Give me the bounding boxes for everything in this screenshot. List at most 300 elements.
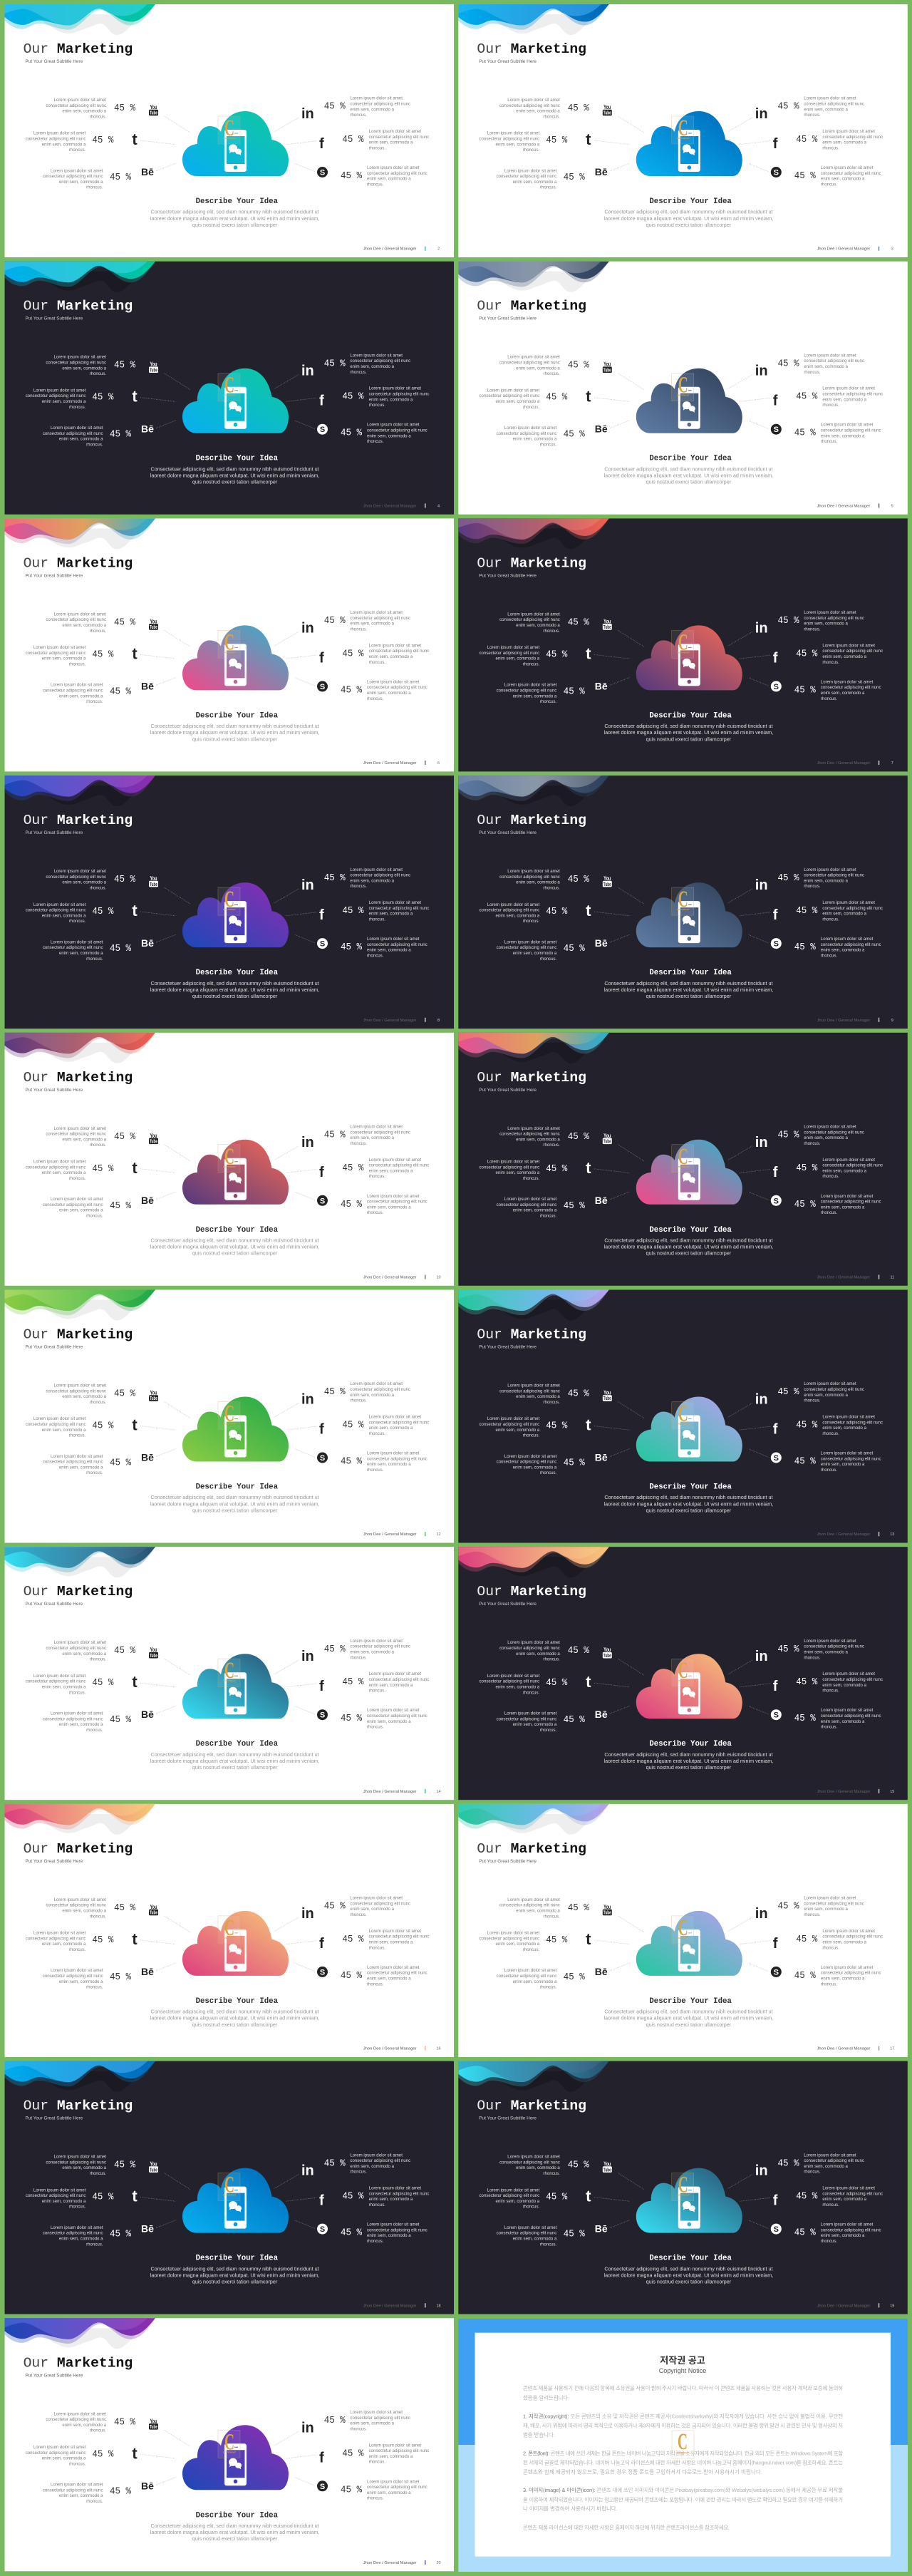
stat: YouTube (46, 98, 190, 133)
stat: Skype: Lorem ipsum dolor sit amet (367, 2479, 420, 2484)
stat: LinkedIn: rhoncus. (350, 1655, 367, 1660)
stat: YouTube: consectetur adipiscing elit nunc (46, 1389, 106, 1393)
cloud with phone: C (678, 1658, 688, 1684)
stat: Skype: S (320, 1711, 325, 1720)
stat: YouTube: You (150, 1132, 157, 1139)
description: quis nostrud exerci tation ullamcorper (192, 479, 278, 485)
stat: Behance: rhoncus. (86, 1728, 103, 1733)
stat: Facebook: enim sem, commodo a (369, 2197, 413, 2202)
description: quis nostrud exerci tation ullamcorper (646, 479, 732, 485)
stat: Behance: enim sem, commodo a (513, 1465, 557, 1470)
subtitle: Put Your Great Subtitle Here (479, 2116, 537, 2121)
stat: Skype: enim sem, commodo a (367, 1462, 411, 1467)
stat: Facebook: consectetur adipiscing elit nunc (369, 649, 429, 654)
wave header (4, 776, 155, 806)
cloud with phone: C (678, 373, 688, 398)
description: quis nostrud exerci tation ullamcorper (646, 736, 732, 742)
stat: Behance: 45 % (564, 686, 585, 697)
description: Consectetuer adipiscing elit, sed diam nonummy nibh euismod tincidunt ut (604, 2265, 772, 2272)
stat: Behance: rhoncus. (540, 1985, 557, 1990)
stat: Behance: Lorem ipsum dolor sit amet (51, 1454, 103, 1459)
stat: YouTube (499, 1640, 644, 1675)
notice card (475, 2333, 891, 2557)
stat: Behance: Lorem ipsum dolor sit amet (504, 1454, 557, 1459)
stat: Facebook: rhoncus. (822, 1945, 839, 1950)
stat: Behance: enim sem, commodo a (59, 1208, 103, 1213)
description: quis nostrud exerci tation ullamcorper (192, 2535, 278, 2542)
stat: Skype: Lorem ipsum dolor sit amet (367, 1194, 420, 1199)
subtitle: Put Your Great Subtitle Here (479, 59, 537, 64)
stat: LinkedIn: enim sem, commodo a (350, 364, 395, 369)
stat: Facebook: consectetur adipiscing elit nunc (369, 392, 429, 397)
description (150, 2255, 319, 2285)
title: Our Marketing (477, 813, 586, 828)
stat: Tumblr: 45 % (92, 135, 114, 146)
stat: LinkedIn (274, 1381, 410, 1417)
stat: YouTube: Lorem ipsum dolor sit amet (507, 1897, 560, 1902)
description: Describe Your Idea (649, 1483, 732, 1491)
stat: Tumblr: t (132, 1673, 138, 1691)
description (150, 455, 319, 485)
stat: Facebook: Lorem ipsum dolor sit amet (822, 1671, 875, 1676)
stat: YouTube: Lorem ipsum dolor sit amet (54, 2411, 106, 2416)
stat: Facebook: f (773, 1936, 778, 1952)
stat: YouTube: Lorem ipsum dolor sit amet (507, 98, 560, 103)
stat: Skype: 45 % (341, 2227, 363, 2239)
stat: Behance: enim sem, commodo a (59, 437, 103, 442)
stat: YouTube (46, 1126, 190, 1161)
stat: YouTube: enim sem, commodo a (516, 2165, 560, 2170)
notice intro (523, 2385, 843, 2401)
stat: Skype: 45 % (794, 428, 816, 439)
stat: Behance (497, 163, 630, 190)
description: laoreet dolore magna aliquam erat volutpat. Ut wisi enim ad minim veniam, (604, 215, 773, 222)
stat: Tumblr (26, 1416, 176, 1438)
stat: LinkedIn: consectetur adipiscing elit nunc (350, 1387, 410, 1392)
stat: LinkedIn: enim sem, commodo a (804, 1907, 848, 1912)
footer: 8 (437, 1019, 440, 1023)
stat: YouTube: Tube (603, 1911, 611, 1916)
stat: Behance (497, 1706, 630, 1733)
stat: YouTube: consectetur adipiscing elit nunc (499, 875, 560, 880)
stat: Skype: consectetur adipiscing elit nunc (821, 1714, 881, 1719)
stat: Skype: consectetur adipiscing elit nunc (367, 942, 428, 947)
stat: Skype (294, 1706, 428, 1730)
stat: Skype: S (320, 426, 325, 434)
stat: Skype: enim sem, commodo a (367, 2233, 411, 2238)
stat: LinkedIn: 45 % (324, 615, 346, 627)
stat: Skype (294, 1192, 428, 1215)
stat: Behance: Lorem ipsum dolor sit amet (51, 1711, 103, 1716)
stat: Facebook: f (319, 1936, 324, 1952)
stat: LinkedIn: 45 % (324, 1644, 346, 1655)
stat: LinkedIn: Lorem ipsum dolor sit amet (804, 1125, 856, 1130)
stat: Skype: S (320, 2483, 325, 2491)
notice intro: 콘텐츠 제품을 사용하기 전에 다음의 항목에 소유권을 사용이 밝혀 주시기 바랍니다. 따라서 이 콘텐츠 제품을 사용하는 것은 사용자 계약과 보증에 동의하 (523, 2385, 843, 2391)
stat: Facebook: enim sem, commodo a (369, 1168, 413, 1173)
notice section 2 (523, 2451, 843, 2475)
stat: YouTube: Lorem ipsum dolor sit amet (54, 1126, 106, 1131)
stat: Skype: rhoncus. (821, 1468, 837, 1473)
stat: Behance: Lorem ipsum dolor sit amet (51, 939, 103, 944)
description: Describe Your Idea (196, 455, 279, 463)
cloud with phone: COPYRIGHT (677, 2194, 690, 2197)
stat: Tumblr: Lorem ipsum dolor sit amet (487, 388, 539, 393)
stat: LinkedIn: Lorem ipsum dolor sit amet (350, 610, 403, 615)
stat: Skype: rhoncus. (821, 696, 837, 701)
stat: Facebook: rhoncus. (822, 917, 839, 922)
stat: Behance: Bē (595, 1195, 608, 1206)
stat: YouTube: consectetur adipiscing elit nunc (46, 2160, 106, 2165)
stat: Facebook: rhoncus. (822, 1689, 839, 1694)
stat: Behance: consectetur adipiscing elit nunc (43, 174, 103, 179)
description: Describe Your Idea (196, 1226, 279, 1235)
panel: slide 7 (458, 518, 908, 771)
cloud with phone: COPYRIGHT (223, 908, 236, 911)
footer: 4 (437, 504, 440, 508)
stat: YouTube: enim sem, commodo a (62, 1652, 107, 1657)
stat: Tumblr: 45 % (546, 135, 568, 146)
cloud with phone: C (224, 373, 234, 398)
footer (817, 761, 893, 766)
stat: YouTube: rhoncus. (90, 1400, 106, 1405)
panel: slide 19 (458, 2061, 908, 2314)
stat: LinkedIn: in (301, 1391, 314, 1407)
stat: Behance: Lorem ipsum dolor sit amet (504, 939, 557, 944)
description: laoreet dolore magna aliquam erat volutpat. Ut wisi enim ad minim veniam, (604, 729, 773, 736)
stat: YouTube: You (150, 1646, 157, 1653)
stat: LinkedIn: 45 % (778, 1644, 799, 1655)
stat: Behance (497, 934, 630, 962)
stat: Behance (43, 1706, 176, 1733)
stat: Tumblr: enim sem, commodo a (496, 142, 540, 147)
stat: Behance: rhoncus. (86, 1470, 103, 1475)
title: Our Marketing (24, 813, 133, 828)
title: Our Marketing (24, 1584, 133, 1599)
stat: LinkedIn: in (755, 106, 768, 122)
wave header (4, 1033, 155, 1063)
stat: LinkedIn: Lorem ipsum dolor sit amet (350, 96, 403, 101)
stat: Facebook: f (773, 1679, 778, 1694)
description: Consectetuer adipiscing elit, sed diam nonummy nibh euismod tincidunt ut (604, 723, 772, 729)
cloud with phone (636, 1654, 742, 1719)
stat: Facebook: consectetur adipiscing elit nunc (369, 1420, 429, 1425)
description: laoreet dolore magna aliquam erat volutpat. Ut wisi enim ad minim veniam, (150, 1244, 319, 1250)
stat: Behance: 45 % (564, 172, 585, 183)
stat: Facebook (740, 2186, 883, 2209)
stat: Facebook: rhoncus. (369, 1689, 385, 1694)
description (150, 1740, 319, 1771)
description: Describe Your Idea (649, 1997, 732, 2006)
stat: Behance: enim sem, commodo a (513, 694, 557, 699)
stat: YouTube: 45 % (568, 2160, 589, 2171)
stat: Skype: S (320, 2225, 325, 2234)
stat: Facebook (740, 643, 883, 666)
stat: YouTube: rhoncus. (90, 371, 106, 376)
stat: Skype (294, 421, 428, 444)
stat: YouTube: You (603, 1903, 611, 1910)
stat: Skype: rhoncus. (821, 1725, 837, 1730)
stat: Behance: 45 % (110, 1457, 132, 1468)
cloud with phone: COPYRIGHT (677, 137, 690, 140)
cloud with phone: COPYRIGHT (223, 2451, 236, 2453)
stat: Behance: consectetur adipiscing elit nunc (43, 689, 103, 694)
title: Our Marketing (24, 555, 133, 571)
stat: Facebook: enim sem, commodo a (369, 140, 413, 145)
stat: YouTube: rhoncus. (543, 2171, 560, 2176)
description: quis nostrud exerci tation ullamcorper (646, 1250, 732, 1257)
stat: Facebook: 45 % (796, 134, 818, 145)
stat: YouTube: enim sem, commodo a (516, 1394, 560, 1399)
stat: LinkedIn: 45 % (778, 1901, 799, 1912)
stat: Behance: consectetur adipiscing elit nunc (497, 1202, 556, 1207)
stat: Facebook: Lorem ipsum dolor sit amet (822, 2186, 875, 2191)
subtitle: Put Your Great Subtitle Here (26, 830, 83, 835)
stat: Tumblr: Lorem ipsum dolor sit amet (487, 131, 539, 136)
stat: LinkedIn (727, 610, 864, 646)
stat: Tumblr: enim sem, commodo a (496, 1170, 540, 1175)
wave header (458, 1804, 609, 1835)
stat: LinkedIn: rhoncus. (350, 2426, 367, 2431)
stat: Skype (748, 163, 881, 187)
stat: Tumblr: rhoncus. (69, 1690, 86, 1695)
footer: Jhon Dee / General Manager (363, 2047, 417, 2051)
stat: YouTube: You (603, 361, 611, 368)
stat: YouTube: Tube (150, 111, 157, 116)
stat: YouTube: Lorem ipsum dolor sit amet (507, 355, 560, 360)
stat: Skype: S (774, 1711, 779, 1720)
stat: YouTube: Tube (603, 1140, 611, 1145)
stat: Behance: rhoncus. (540, 185, 557, 190)
panel: slide 16 (4, 1804, 454, 2057)
description (604, 1740, 773, 1771)
stat: Tumblr: consectetur adipiscing elit nunc (26, 908, 86, 913)
stat: Skype: 45 % (341, 2484, 363, 2495)
stat: LinkedIn: 45 % (778, 2158, 799, 2169)
stat: Behance: 45 % (564, 2229, 585, 2240)
stat: Skype: rhoncus. (367, 2496, 384, 2501)
stat: Tumblr: Lorem ipsum dolor sit amet (33, 1674, 86, 1679)
stat: Facebook: 45 % (796, 1934, 818, 1945)
stat: Skype: rhoncus. (367, 1982, 384, 1987)
footer: 20 (436, 2561, 441, 2565)
cloud with phone (182, 1654, 289, 1719)
stat: YouTube: consectetur adipiscing elit nunc (46, 1646, 106, 1651)
stat: Tumblr: t (132, 644, 138, 662)
stat: Tumblr: Lorem ipsum dolor sit amet (487, 1416, 539, 1421)
footer: 9 (891, 1019, 893, 1023)
stat: YouTube: 45 % (114, 1902, 136, 1914)
stat: Behance: enim sem, commodo a (513, 1208, 557, 1213)
description: Consectetuer adipiscing elit, sed diam nonummy nibh euismod tincidunt ut (151, 1494, 319, 1500)
footer: 6 (437, 761, 440, 766)
panel: slide 11 (458, 1033, 908, 1286)
stat: Tumblr: Lorem ipsum dolor sit amet (487, 1674, 539, 1679)
footer (817, 2046, 894, 2051)
stat: Skype: consectetur adipiscing elit nunc (367, 685, 428, 690)
stat: Behance (497, 2220, 630, 2247)
stat: Tumblr: Lorem ipsum dolor sit amet (33, 2445, 86, 2450)
stat: LinkedIn: rhoncus. (350, 1912, 367, 1917)
footer: 15 (890, 1790, 894, 1794)
stat: LinkedIn: 45 % (778, 872, 799, 884)
stat: Skype: 45 % (794, 942, 816, 953)
stat: Behance: Bē (595, 680, 608, 691)
footer: Jhon Dee / General Manager (363, 1790, 417, 1794)
stat: Skype: 45 % (794, 1456, 816, 1467)
stat: Behance: rhoncus. (86, 1985, 103, 1990)
stat: Facebook: Lorem ipsum dolor sit amet (822, 129, 875, 134)
stat: YouTube: Tube (150, 882, 157, 887)
wave header (458, 2061, 609, 2092)
stat: YouTube (46, 1640, 190, 1675)
stat: LinkedIn (727, 1639, 864, 1674)
stat: Tumblr: enim sem, commodo a (42, 2456, 86, 2461)
description: laoreet dolore magna aliquam erat volutpat. Ut wisi enim ad minim veniam, (150, 2529, 319, 2535)
stat: YouTube: 45 % (568, 1389, 589, 1400)
stat: LinkedIn: rhoncus. (804, 1912, 821, 1917)
stat: Tumblr (26, 1159, 176, 1181)
stat: Facebook: f (319, 650, 324, 666)
stat: LinkedIn: rhoncus. (350, 884, 367, 889)
stat: Facebook: consectetur adipiscing elit nunc (822, 1163, 883, 1168)
stat: YouTube: enim sem, commodo a (516, 1908, 560, 1913)
description (150, 197, 319, 228)
notice section 1: 벌을 받습니다. (523, 2432, 555, 2438)
stat: LinkedIn: 45 % (324, 1386, 346, 1398)
stat: Tumblr: rhoncus. (523, 662, 540, 667)
cloud with phone (182, 2168, 289, 2233)
stat: Skype (748, 1192, 881, 1215)
stat: Facebook: f (773, 136, 778, 152)
description: quis nostrud exerci tation ullamcorper (192, 1250, 278, 1257)
stat: Facebook: consectetur adipiscing elit nunc (822, 649, 883, 654)
stat: YouTube: enim sem, commodo a (62, 2165, 107, 2170)
title: Our Marketing (24, 299, 133, 314)
stat: Behance: consectetur adipiscing elit nunc (43, 1460, 103, 1465)
stat: Skype: S (320, 1197, 325, 1205)
stat: Behance: consectetur adipiscing elit nunc (43, 1202, 103, 1207)
stat: Skype: S (774, 1454, 779, 1463)
stat: Behance: enim sem, commodo a (513, 180, 557, 185)
cloud with phone: C (224, 629, 234, 655)
stat: Tumblr: enim sem, commodo a (496, 656, 540, 661)
cloud with phone: COPYRIGHT (677, 1165, 690, 1168)
stat: Skype: enim sem, commodo a (367, 2490, 411, 2495)
stat: LinkedIn: 45 % (324, 2158, 346, 2169)
stat: LinkedIn (274, 2410, 410, 2446)
stat: LinkedIn (727, 2153, 864, 2189)
stat: Skype: Lorem ipsum dolor sit amet (367, 937, 420, 942)
stat: LinkedIn (274, 96, 410, 132)
stat: LinkedIn: rhoncus. (350, 2170, 367, 2175)
stat: Tumblr: 45 % (546, 392, 568, 403)
stat: Skype (748, 1448, 881, 1473)
stat: LinkedIn: consectetur adipiscing elit nunc (804, 616, 864, 621)
stat: YouTube: You (150, 361, 157, 368)
stat: Skype (748, 1963, 881, 1987)
stat: Facebook: 45 % (342, 648, 364, 659)
description: quis nostrud exerci tation ullamcorper (192, 1764, 278, 1771)
stat: Facebook: enim sem, commodo a (369, 2454, 413, 2459)
stat: Facebook: Lorem ipsum dolor sit amet (822, 1158, 875, 1163)
stat: Behance: enim sem, commodo a (59, 2237, 103, 2242)
stat: YouTube: Tube (150, 1140, 157, 1145)
stat: YouTube: consectetur adipiscing elit nunc (499, 1132, 560, 1137)
watermark (672, 2429, 694, 2458)
footer: 10 (436, 1276, 441, 1280)
stat: Skype: rhoncus. (367, 439, 384, 444)
subtitle: Put Your Great Subtitle Here (26, 1859, 83, 1864)
stat: Facebook: Lorem ipsum dolor sit amet (822, 1929, 875, 1934)
stat: YouTube (46, 2411, 190, 2446)
stat: Tumblr: Lorem ipsum dolor sit amet (33, 645, 86, 650)
stat: Tumblr: rhoncus. (69, 1433, 86, 1438)
stat: LinkedIn: enim sem, commodo a (804, 1649, 848, 1654)
cloud with phone (636, 111, 742, 176)
stat: Skype: rhoncus. (367, 1725, 384, 1730)
description: Consectetuer adipiscing elit, sed diam nonummy nibh euismod tincidunt ut (604, 209, 772, 215)
stat: Facebook: 45 % (796, 391, 818, 403)
description: Describe Your Idea (196, 711, 279, 720)
stat: YouTube: Tube (603, 368, 611, 373)
stat: LinkedIn (727, 867, 864, 903)
stat: LinkedIn: consectetur adipiscing elit nunc (350, 873, 410, 878)
stat: Behance: rhoncus. (540, 957, 557, 962)
stat: Tumblr: rhoncus. (69, 405, 86, 410)
stat: YouTube: You (150, 103, 157, 110)
notice section 3: 3. 이미지(image) & 아이콘(icon): 콘텐츠 내에 쓰인 이미지와 아이콘은 Pixabay(pixabay.com)와 Webalys(webalys.com) 등에서 제공한 무료 저작물 (523, 2487, 843, 2493)
stat: YouTube: Tube (150, 1396, 157, 1401)
stat: Facebook: f (319, 2193, 324, 2209)
stat: YouTube: You (150, 617, 157, 624)
stat: Skype: rhoncus. (367, 1468, 384, 1473)
stat: LinkedIn: rhoncus. (804, 2170, 821, 2175)
footer: Jhon Dee / General Manager (363, 1276, 417, 1280)
footer: Jhon Dee / General Manager (363, 1019, 417, 1023)
notice section 1: 재, 배포, 사기 위험에 따라서 영리 목적으로 이용하거나 제3자에게 이용하는 것은 금지되어 있습니다. 이러한 불법 행위 발견 시 관련된 민사 및 형사상의 처 (523, 2422, 843, 2429)
stat: Facebook: enim sem, commodo a (822, 397, 867, 402)
stat: YouTube: 45 % (114, 874, 136, 885)
stat: Tumblr: 45 % (546, 1163, 568, 1175)
footer (363, 2046, 441, 2051)
stat: YouTube: rhoncus. (543, 885, 560, 890)
stat: Tumblr (26, 902, 176, 924)
stat: Skype: enim sem, commodo a (367, 1976, 411, 1981)
stat: Behance: 45 % (110, 1714, 132, 1726)
stat: Facebook: rhoncus. (369, 1431, 385, 1436)
stat: YouTube: enim sem, commodo a (62, 1908, 107, 1913)
stat: Tumblr: t (586, 388, 591, 406)
stat: LinkedIn: rhoncus. (350, 370, 367, 375)
stat: Behance: rhoncus. (540, 699, 557, 704)
stat: Skype: 45 % (794, 684, 816, 696)
stat: Facebook (286, 386, 429, 409)
stat: Facebook (740, 1929, 883, 1952)
cloud with phone: COPYRIGHT (677, 651, 690, 654)
footer: 12 (436, 1532, 441, 1537)
footer (817, 247, 893, 252)
stat: YouTube: You (603, 1646, 611, 1653)
stat: Facebook: rhoncus. (369, 403, 385, 408)
stat: LinkedIn (727, 1896, 864, 1932)
footer (363, 247, 440, 252)
cloud with phone: COPYRIGHT (677, 394, 690, 397)
stat: Behance: enim sem, commodo a (59, 180, 103, 185)
stat: LinkedIn: Lorem ipsum dolor sit amet (350, 867, 403, 872)
stat: LinkedIn: Lorem ipsum dolor sit amet (804, 1381, 856, 1386)
stat: Skype: enim sem, commodo a (821, 1205, 865, 1210)
